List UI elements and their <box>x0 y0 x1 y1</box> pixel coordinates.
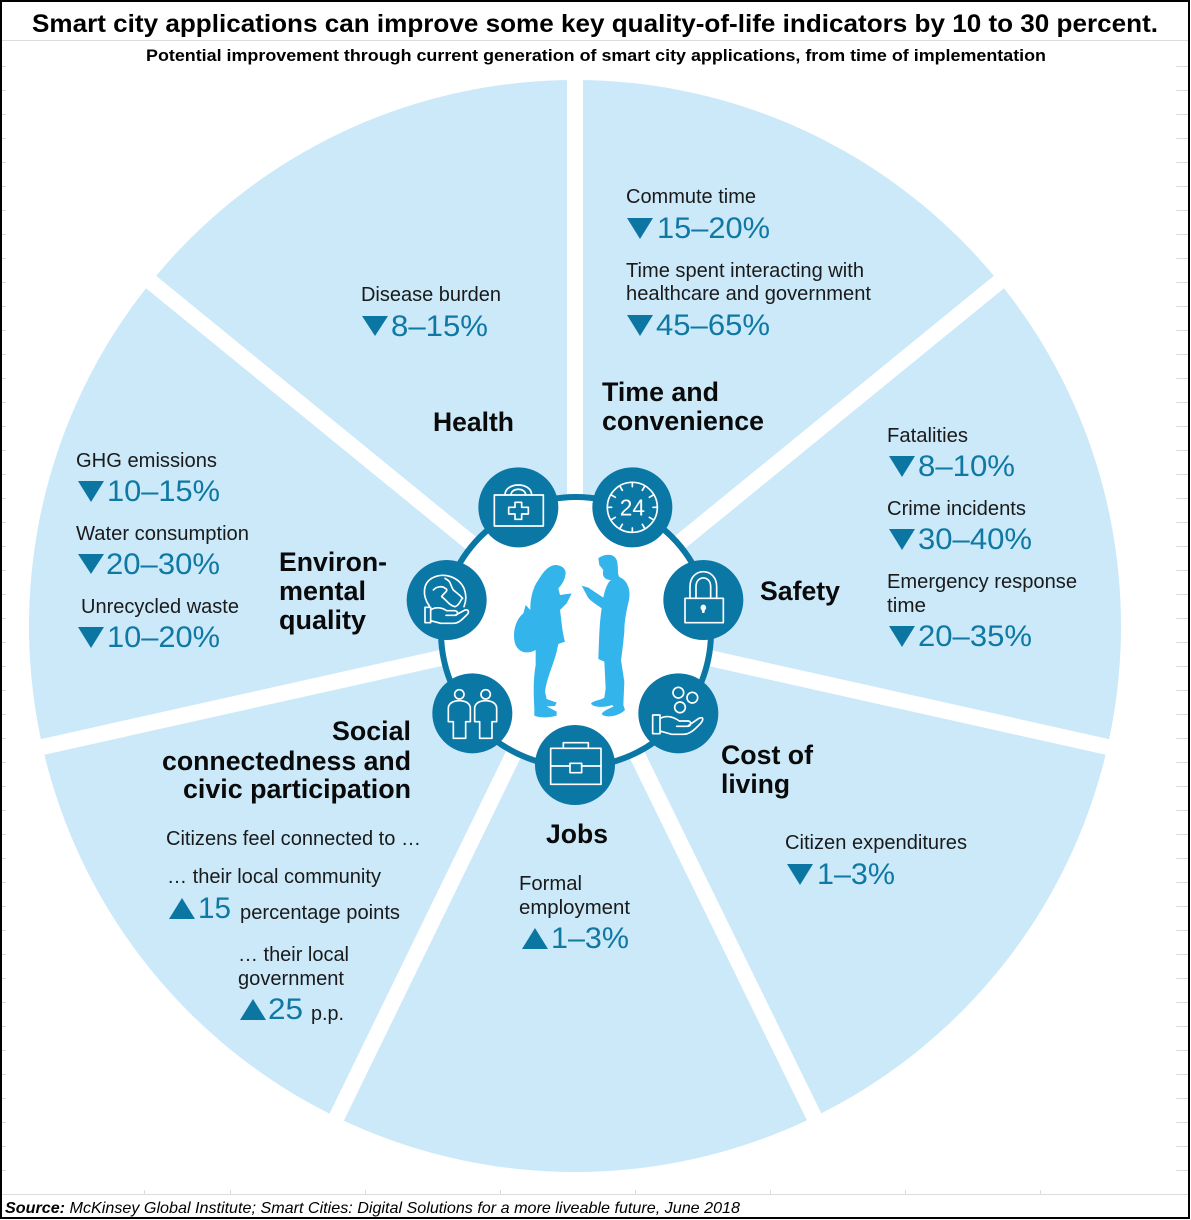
cost of living heading: Cost of <box>721 740 814 770</box>
icon: 24-hour clock: 24 <box>620 494 645 520</box>
metric: commute time: 15–20% <box>657 212 770 245</box>
metric: crime incidents <box>887 498 1032 556</box>
icon: coins over hand <box>638 673 718 753</box>
metric: unrecycled waste <box>78 596 239 654</box>
metric: time spent interacting <box>626 260 871 342</box>
icon: health kit <box>478 467 558 547</box>
jobs heading: Jobs <box>546 819 608 849</box>
central hub with icons <box>407 467 743 805</box>
subtitle: Potential improvement through current generation of smart city applications, from time of implementation <box>146 46 1046 65</box>
metric: citizen expenditures: 1–3% <box>817 858 895 891</box>
hub ring <box>441 497 711 767</box>
metric: formal employment: 1–3% <box>551 922 629 955</box>
panel: health <box>361 284 514 437</box>
metric: fatalities: 8–10% <box>918 450 1015 483</box>
panel: environmental quality <box>76 450 387 654</box>
metric: emergency response time <box>887 571 1077 653</box>
environmental quality heading: quality <box>279 605 366 635</box>
intro line: Citizens feel connected to … <box>166 828 421 850</box>
metric: local community: 15 <box>198 892 231 925</box>
metric: formal employment: employment <box>519 897 630 919</box>
title: Smart city applications can improve some key quality-of-life indicators by 10 to 30 percent. <box>32 10 1158 38</box>
time and convenience heading: Time and <box>602 377 719 407</box>
metric: citizen expenditures <box>785 832 967 891</box>
metric: GHG emissions: GHG emissions <box>76 450 217 472</box>
metric: water consumption: Water consumption <box>76 523 249 545</box>
metric: time spent interacting: Time spent interacting with <box>626 260 864 282</box>
metric: unrecycled waste: 10–20% <box>107 621 220 654</box>
metric: emergency response time: time <box>887 595 926 617</box>
metric: emergency response time: 20–35% <box>918 620 1032 653</box>
metric: local government: government <box>238 968 344 990</box>
environmental quality heading: Environ- <box>279 547 387 577</box>
panel: social connectedness and civic participation <box>162 716 421 1026</box>
metric: local community <box>167 866 400 925</box>
people silhouettes <box>514 555 629 717</box>
safety heading: Safety <box>760 576 840 606</box>
metric: local community: … their local community <box>167 866 381 888</box>
source note: Source: McKinsey Global Institute; Smart Cities: Digital Solutions for a more liveable future, June 2018 <box>5 1200 740 1217</box>
metric: local government <box>238 944 349 1026</box>
metric: unrecycled waste: Unrecycled waste <box>81 596 239 618</box>
time and convenience heading: convenience <box>602 406 764 436</box>
metric: water consumption <box>76 523 249 581</box>
metric: commute time <box>626 186 770 245</box>
panel: cost of living <box>721 740 967 891</box>
metric: citizen expenditures: Citizen expenditures <box>785 832 967 854</box>
health heading: Health <box>433 407 514 437</box>
metric: time spent interacting: 45–65% <box>656 309 770 342</box>
metric: crime incidents: Crime incidents <box>887 498 1026 520</box>
metric: formal employment: Formal <box>519 873 582 895</box>
metric: fatalities <box>887 425 1015 483</box>
icon: globe in hand <box>407 560 487 640</box>
panel: time and convenience <box>602 186 871 436</box>
icon: briefcase <box>535 725 615 805</box>
metric: GHG emissions <box>76 450 220 508</box>
metric: water consumption: 20–30% <box>106 548 220 581</box>
icon: padlock <box>663 560 743 640</box>
icon: 24-hour clock <box>592 467 672 547</box>
metric: time spent interacting: healthcare and government <box>626 283 871 305</box>
social connectedness heading: civic participation <box>183 774 411 804</box>
metric: disease burden: 8–15% <box>391 310 488 343</box>
metric: disease burden <box>361 284 501 343</box>
metric: GHG emissions: 10–15% <box>107 475 220 508</box>
metric: fatalities: Fatalities <box>887 425 968 447</box>
panel: safety <box>760 425 1077 653</box>
environmental quality heading: mental <box>279 576 366 606</box>
panel: jobs <box>519 819 630 955</box>
metric: local government: 25 <box>268 993 303 1026</box>
icon: two people <box>432 673 512 753</box>
social connectedness heading: connectedness and <box>162 746 411 776</box>
metric: crime incidents: 30–40% <box>918 523 1032 556</box>
metric: local community: percentage points <box>240 902 400 924</box>
social connectedness heading: Social <box>332 716 411 746</box>
metric: local government: p.p. <box>311 1003 344 1025</box>
metric: emergency response time: Emergency response <box>887 571 1077 593</box>
metric: formal employment <box>519 873 630 955</box>
metric: local government: … their local <box>238 944 349 966</box>
metric: commute time: Commute time <box>626 186 756 208</box>
cost of living heading: living <box>721 769 790 799</box>
metric: disease burden: Disease burden <box>361 284 501 306</box>
